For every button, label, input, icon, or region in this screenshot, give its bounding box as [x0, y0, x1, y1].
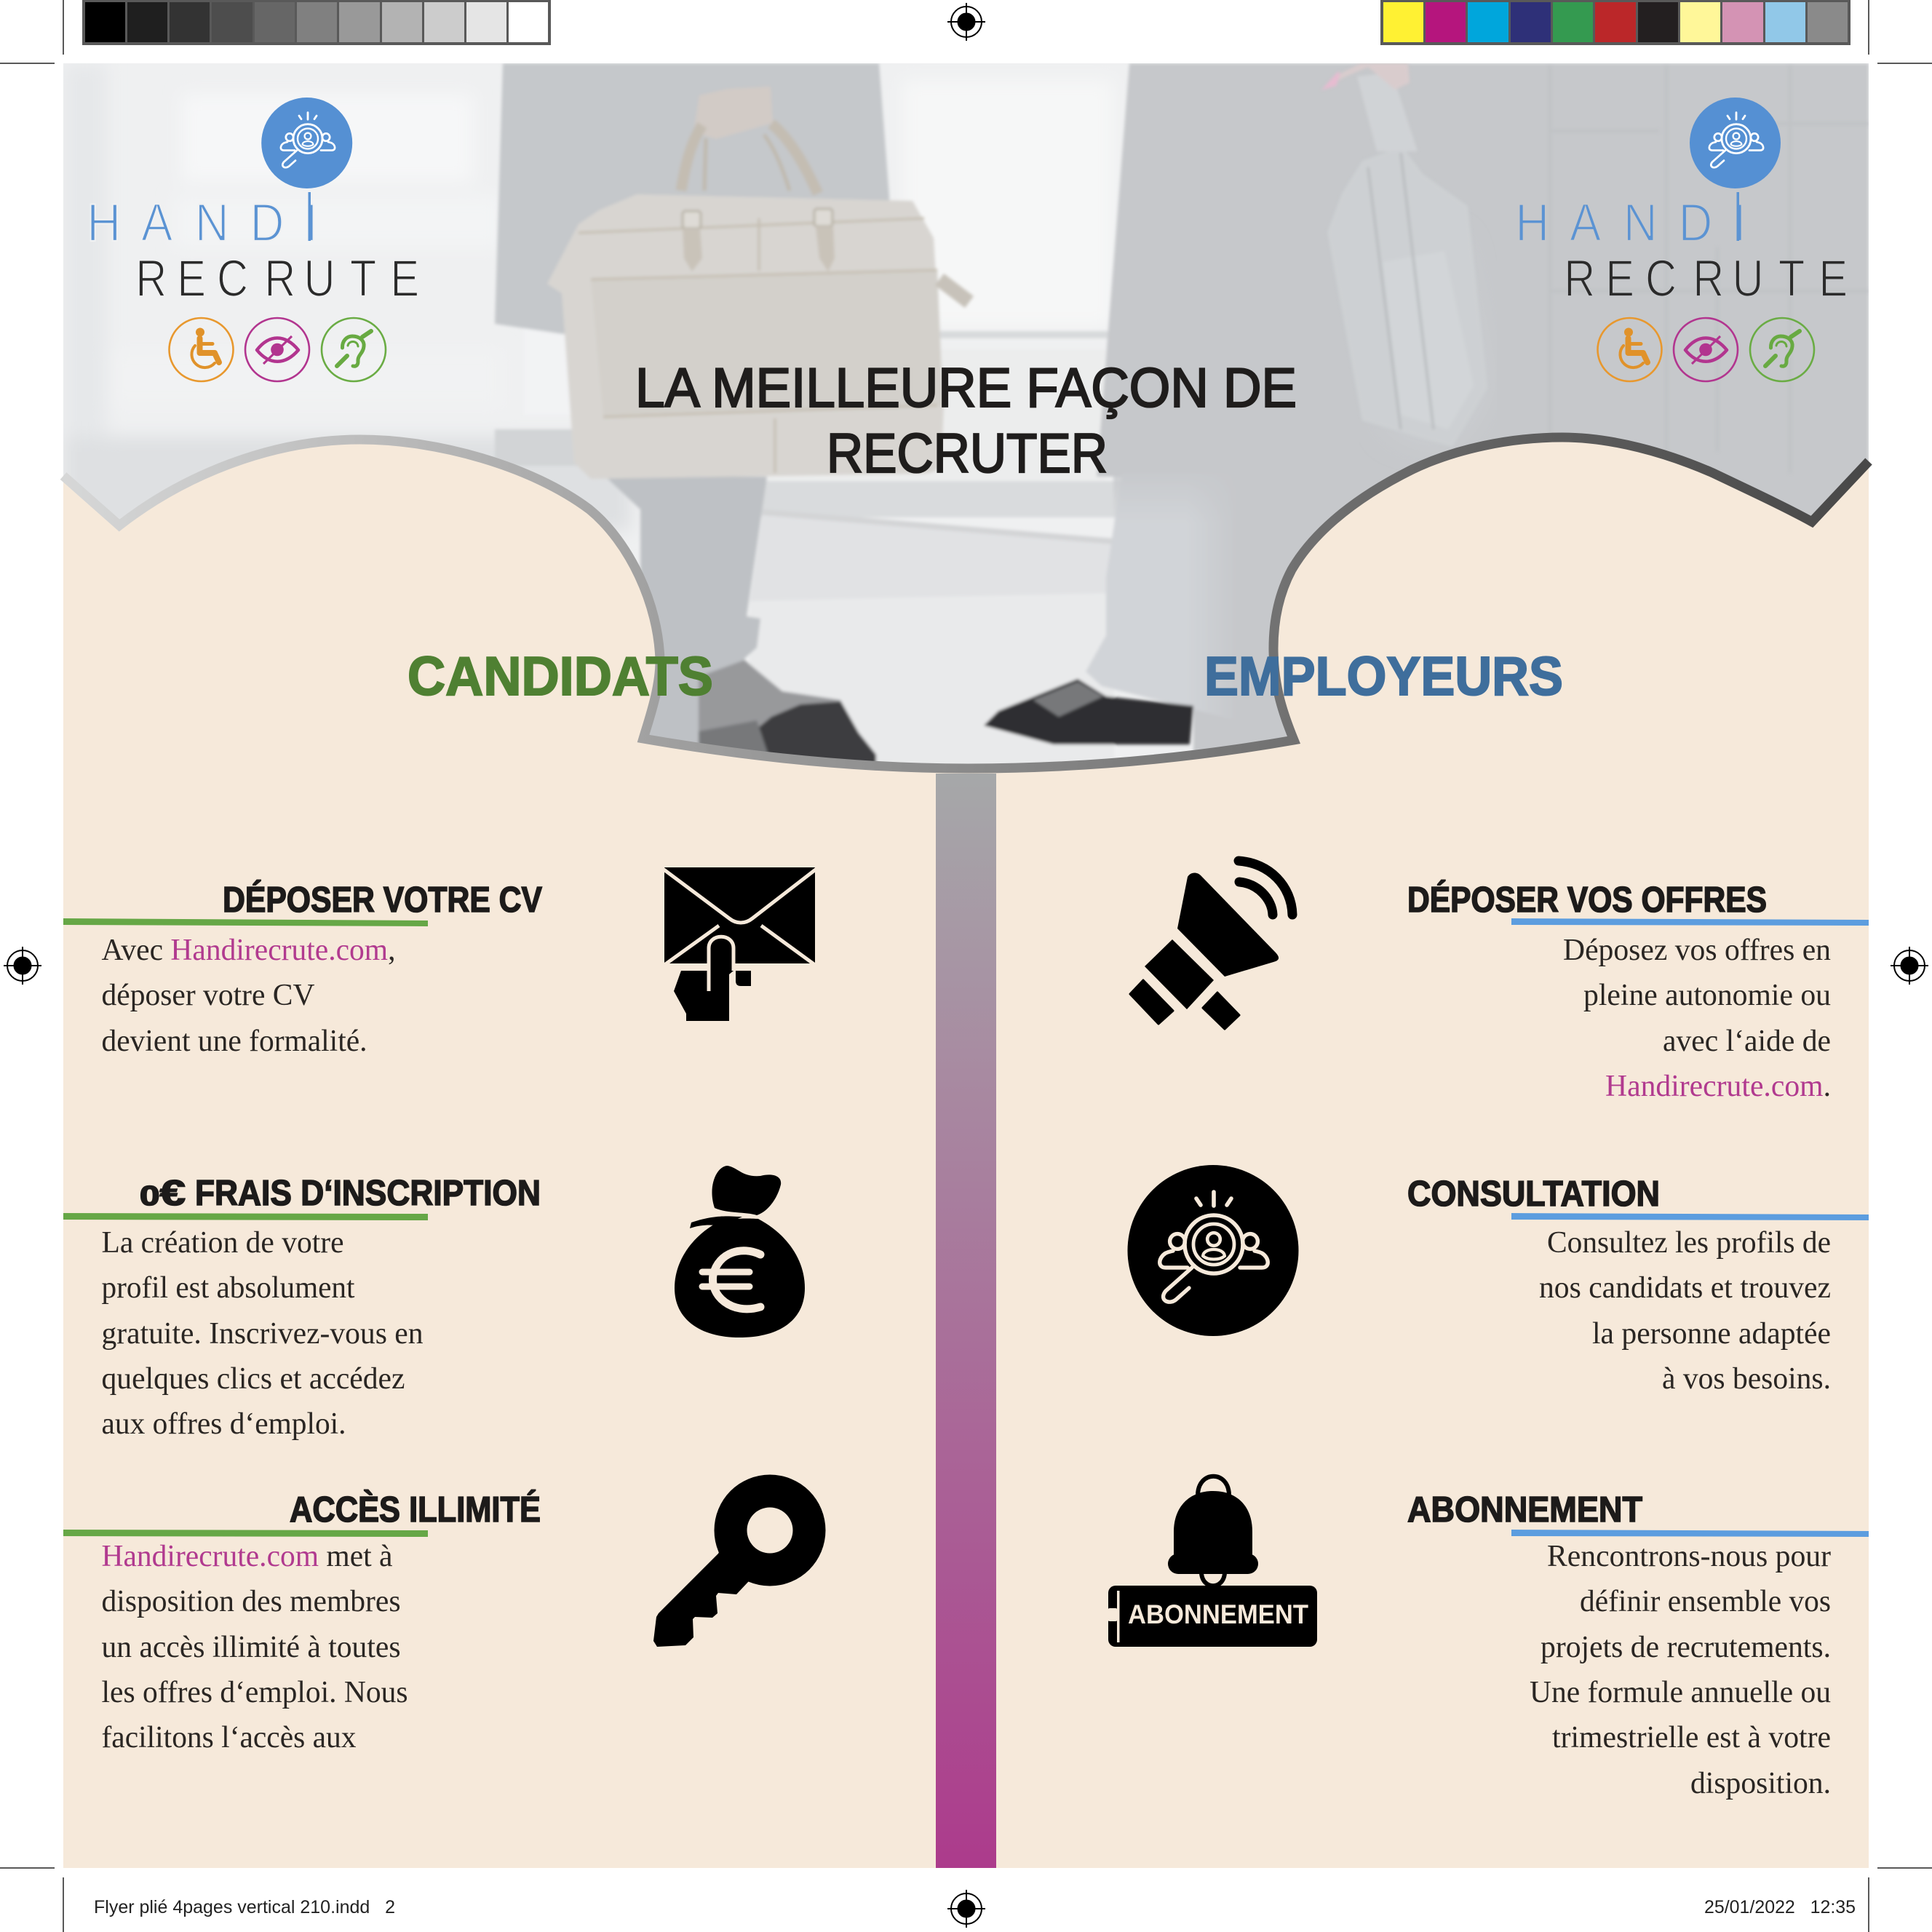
left trouser leg: [605, 477, 767, 757]
right shoe: [984, 679, 1193, 744]
body text: [1539, 1226, 1831, 1396]
central gradient divider: [936, 774, 996, 1868]
body text: profil est absolument: [102, 1271, 355, 1305]
title: RECRUTER: [827, 423, 1108, 485]
left shoe: [697, 659, 850, 732]
logo badge: [261, 98, 352, 188]
header photo: businesspeople with briefcases: [63, 63, 1869, 784]
body text: trimestrielle est à votre: [1552, 1721, 1831, 1754]
body text: un accès illimité à toutes: [102, 1631, 400, 1664]
body text: [102, 1226, 424, 1441]
soft building background: [63, 74, 632, 531]
title: LA MEILLEURE FAÇON DE: [635, 357, 1297, 419]
registration mark bottom: [947, 1890, 985, 1928]
registration mark left: [4, 947, 41, 985]
heading: DÉPOSER VOS OFFRES: [1407, 880, 1767, 920]
rule: [63, 1213, 428, 1220]
logo left: [87, 98, 419, 381]
body text: déposer votre CV: [102, 979, 314, 1012]
rule: [1511, 918, 1869, 926]
body text: facilitons l‘accès aux: [102, 1721, 357, 1754]
body text: Avec Handirecrute.com,: [102, 934, 396, 967]
accessibility icons: [1598, 318, 1814, 381]
logo wordmark: RECRUTE: [135, 250, 419, 307]
right trouser leg: [1086, 480, 1205, 709]
right briefcase: [1330, 154, 1468, 421]
body text: aux offres d‘emploi.: [102, 1407, 346, 1441]
accessibility icons: [169, 318, 386, 381]
rule: [1511, 1530, 1869, 1537]
employer block: consultation: [1407, 1174, 1869, 1396]
icon: subscription bell: [1108, 1476, 1317, 1647]
body text: Une formule annuelle ou: [1530, 1676, 1831, 1709]
logo wordmark: [1515, 192, 1848, 307]
body text: La création de votre: [102, 1226, 343, 1260]
logo wordmark: HANDI: [1515, 192, 1746, 253]
print slug right: 25/01/2022 12:35: [1704, 1897, 1856, 1917]
body text: Handirecrute.com.: [1605, 1070, 1831, 1103]
pavement: [753, 481, 1132, 517]
hand and handles: [693, 87, 773, 139]
cream panel with curved outline: [63, 437, 1869, 1868]
badge label: ABONNEMENT: [1128, 1599, 1308, 1629]
body text: définir ensemble vos: [1580, 1585, 1831, 1618]
body text: Déposez vos offres en: [1563, 934, 1831, 967]
body text: [1563, 934, 1831, 1103]
icon: key: [653, 1474, 825, 1647]
body text: à vos besoins.: [1662, 1362, 1831, 1396]
candidate block: frais d'inscription: [63, 1174, 541, 1441]
icon: money bag with euro: [675, 1166, 805, 1337]
candidate block: déposer votre CV: [63, 880, 542, 1058]
body text: Handirecrute.com met à: [102, 1540, 393, 1573]
greyscale colour bar: [82, 0, 551, 45]
process colour bar: [1380, 0, 1850, 45]
body text: Consultez les profils de: [1547, 1226, 1831, 1260]
left coat: [495, 63, 891, 335]
rule: [63, 918, 428, 926]
heading: CONSULTATION: [1407, 1174, 1660, 1214]
heading: ACCÈS ILLIMITÉ: [290, 1490, 541, 1530]
body text: [102, 934, 396, 1058]
body text: devient une formalité.: [102, 1025, 367, 1058]
body text: disposition des membres: [102, 1585, 400, 1618]
body text: nos candidats et trouvez: [1539, 1271, 1831, 1305]
rule: [1511, 1213, 1869, 1220]
body text: [1530, 1540, 1831, 1800]
body text: quelques clics et accédez: [102, 1362, 405, 1396]
print slug left: Flyer plié 4pages vertical 210.indd 2: [94, 1897, 395, 1917]
body text: pleine autonomie ou: [1583, 979, 1831, 1012]
body text: Rencontrons-nous pour: [1547, 1540, 1831, 1573]
leather bag: [547, 194, 944, 479]
registration mark top: [947, 3, 985, 41]
body text: la personne adaptée: [1592, 1317, 1831, 1351]
heading: ABONNEMENT: [1407, 1490, 1642, 1530]
icon: envelope and hand: [663, 867, 816, 1021]
body text: disposition.: [1690, 1767, 1831, 1800]
logo badge: [1690, 98, 1781, 188]
logo wordmark: HANDI: [87, 192, 318, 253]
employer block: déposer vos offres: [1407, 880, 1869, 1103]
right briefcase tone: [1379, 247, 1477, 437]
right coat and door: [1097, 63, 1869, 757]
title: [635, 357, 1297, 485]
heading: employeurs: EMPLOYEURS: [1204, 645, 1563, 707]
heading: FRAIS D‘INSCRIPTION: [195, 1174, 541, 1213]
door panels: [1550, 65, 1869, 473]
heading: 0€: [140, 1174, 186, 1213]
right hand: [1339, 63, 1410, 88]
body text: les offres d‘emploi. Nous: [102, 1676, 408, 1709]
heading: candidats: CANDIDATS: [408, 645, 713, 707]
employer block: abonnement: [1407, 1490, 1869, 1800]
body text: projets de recrutements.: [1541, 1631, 1831, 1664]
candidate block: accès illimité: [63, 1490, 541, 1754]
heading: DÉPOSER VOTRE CV: [223, 880, 542, 920]
rule: [63, 1530, 428, 1537]
body text: avec l‘aide de: [1663, 1025, 1831, 1058]
icon: megaphone: [1130, 861, 1292, 1029]
logo wordmark: RECRUTE: [1564, 250, 1848, 307]
body text: gratuite. Inscrivez-vous en: [102, 1317, 424, 1351]
icon: candidate search badge: [1128, 1165, 1298, 1336]
registration mark right: [1891, 947, 1928, 985]
logo right: [1515, 98, 1848, 381]
body text: [102, 1540, 408, 1754]
logo wordmark: [87, 192, 419, 307]
